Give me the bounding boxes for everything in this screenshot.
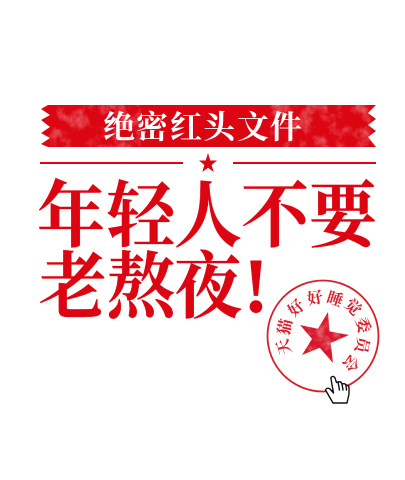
icon: divider star [199,153,217,172]
stamp text: 猫 [275,317,296,337]
stamp star [300,312,349,363]
banner texture right [270,105,376,147]
stamp text [274,287,374,375]
banner heading: 头 [203,109,238,145]
stamp text: 好 [305,287,325,309]
stamp text: 好 [284,296,308,320]
banner texture left [41,105,141,147]
exclamation mark: ! [243,242,269,329]
stamp text: 睡 [324,288,345,311]
banner heading: 文 [237,109,269,145]
stamp text: 委 [352,315,374,336]
title line 2 [39,248,242,329]
stamp text: 天 [274,337,295,357]
banner heading [103,109,302,145]
title line 2: 熬 [107,248,180,329]
title line 1: 要 [309,177,379,258]
title line 1 [37,177,379,258]
banner heading: 红 [170,109,202,145]
banner heading: 件 [270,109,302,145]
stamp text: 员 [350,335,372,358]
title [37,177,379,329]
title line 1: 年 [37,177,105,258]
title line 1: 不 [241,177,311,258]
title line 1: 人 [174,177,242,258]
title line 1: 轻 [107,177,178,258]
stamp text: 觉 [341,295,365,319]
stamp ring [268,280,378,392]
divider with star [40,153,376,172]
title line 2: 夜 [174,248,242,329]
banner heading: 密 [136,109,170,145]
banner heading: 绝 [103,109,135,145]
title line 2: 老 [39,248,107,329]
icon: hand cursor [326,376,349,403]
infographic canvas [38,105,380,404]
stamp text: 会 [339,351,363,375]
stamp [268,280,378,403]
banner [41,105,376,147]
